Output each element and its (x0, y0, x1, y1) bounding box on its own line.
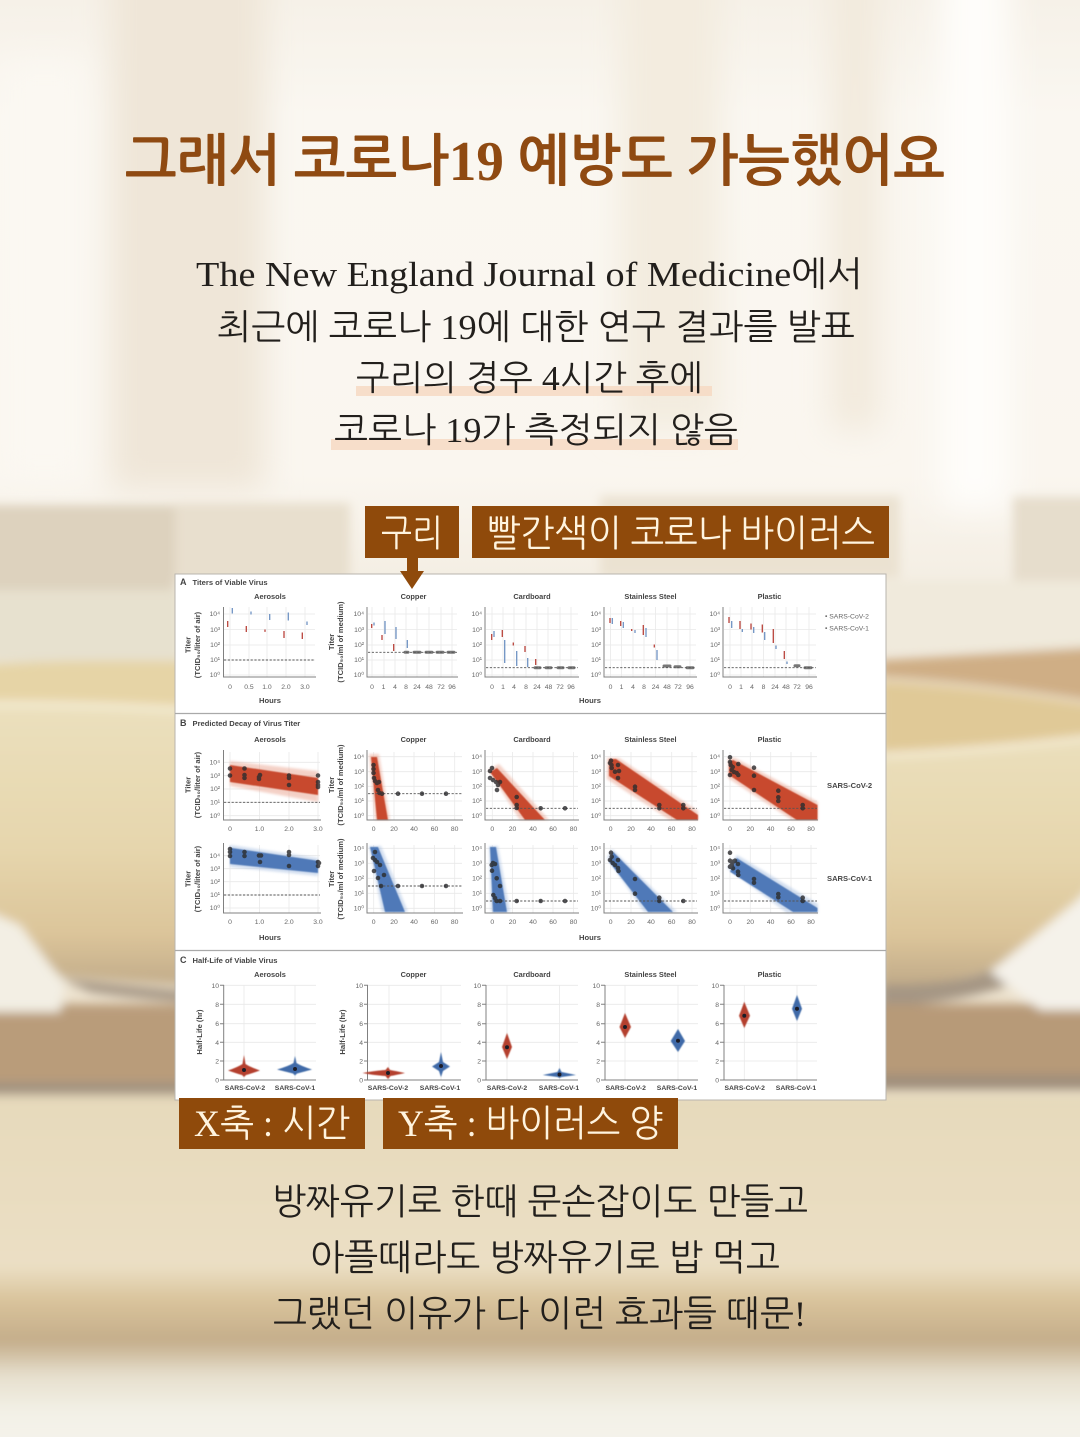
panel A heading: A (180, 577, 187, 587)
chart: stainless steel titers: 1 (620, 684, 624, 691)
chart: cardboard SARS-CoV-2 decay: 0 (490, 826, 494, 833)
chart: aerosols titers: 10² (210, 642, 221, 649)
chart: cardboard SARS-CoV-2 decay: 60 (549, 826, 557, 833)
chart: stainless steel SARS-CoV-1 decay: 10² (591, 876, 602, 882)
chart: aerosols SARS-CoV-1 decay: 10¹ (210, 892, 221, 899)
panel: NEJM chart figure (175, 574, 886, 1100)
chart: copper SARS-CoV-1 decay: 20 (390, 919, 398, 926)
chart: aerosols half-life: 6 (215, 1021, 219, 1028)
column titles: Copper (401, 735, 427, 744)
label: SARS-CoV-1 row: SARS-CoV-1 (827, 874, 873, 883)
chart: plastic titers: 10⁰ (710, 671, 720, 679)
panel B heading: B (180, 718, 187, 728)
chart: plastic SARS-CoV-1 decay: 10² (710, 876, 721, 882)
chart: aerosols SARS-CoV-2 decay: 0 (228, 826, 232, 833)
chart: stainless steel SARS-CoV-1 decay: 10¹ (591, 890, 602, 898)
chart: stainless steel titers: 72 (674, 684, 682, 691)
chart: plastic titers: 10³ (710, 627, 721, 634)
chart: aerosols SARS-CoV-1 decay: (TCID₅₀/liter of air) (193, 845, 202, 912)
panel B heading: Predicted Decay of Virus Titer (192, 719, 300, 728)
highlight: line 3 underline (356, 386, 712, 396)
chart: cardboard half-life (473, 983, 579, 1092)
chart: copper SARS-CoV-1 decay: 10² (354, 876, 365, 882)
chart: stainless steel SARS-CoV-1 decay: 40 (647, 919, 655, 926)
chart: cardboard half-life: SARS-CoV-2 (487, 1085, 527, 1092)
chart: copper SARS-CoV-2 decay: 10² (354, 784, 365, 790)
chart: stainless steel half-life (592, 983, 698, 1092)
legend: • SARS-CoV-1 (825, 626, 869, 632)
chart: cardboard SARS-CoV-1 decay: 10³ (472, 860, 483, 868)
chart: plastic titers: 1 (739, 684, 743, 691)
chart: plastic titers: 24 (771, 684, 779, 691)
panel C heading: Half-Life of Viable Virus (192, 956, 277, 965)
chart: stainless steel half-life: 4 (596, 1040, 600, 1047)
chart: cardboard SARS-CoV-1 decay: 10² (472, 876, 483, 882)
chart: copper SARS-CoV-1 decay: Titer (327, 871, 336, 887)
chart: copper SARS-CoV-2 decay: 10⁰ (354, 812, 364, 820)
chart: stainless steel SARS-CoV-2 decay: 60 (668, 826, 676, 833)
chart: stainless steel SARS-CoV-1 decay: 20 (627, 919, 635, 926)
chart: aerosols half-life: 10 (211, 983, 219, 990)
chart: plastic half-life: 4 (715, 1040, 719, 1047)
column titles (254, 735, 781, 744)
chart: copper SARS-CoV-1 decay (327, 838, 463, 926)
chart: copper SARS-CoV-2 decay: 10³ (354, 769, 365, 776)
chart: stainless steel half-life: 8 (596, 1002, 600, 1009)
chart: aerosols SARS-CoV-2 decay: 3.0 (313, 826, 323, 833)
chart: stainless steel SARS-CoV-2 decay: 20 (627, 826, 635, 833)
chart: cardboard titers: 72 (556, 684, 564, 691)
chart: copper titers: 0 (370, 684, 374, 691)
chart: plastic titers: 10⁴ (710, 611, 720, 618)
chart: stainless steel titers: 10⁰ (591, 671, 601, 679)
chart: copper titers: 1 (382, 684, 386, 691)
chart: copper SARS-CoV-2 decay: 0 (372, 826, 376, 833)
chart: aerosols SARS-CoV-2 decay: 2.0 (284, 826, 294, 833)
chart: plastic SARS-CoV-1 decay: 10⁴ (710, 846, 720, 852)
closing line 2: 아플때라도 방짜유기로 밥 먹고 (310, 1238, 780, 1278)
closing line 3: 그랬던 이유가 다 이런 효과들 때문! (273, 1294, 806, 1334)
column titles: Aerosols (254, 735, 286, 744)
chart: plastic SARS-CoV-1 decay: 20 (747, 919, 754, 926)
chart: aerosols SARS-CoV-2 decay: 10⁰ (210, 812, 220, 820)
chart: cardboard half-life: 4 (477, 1040, 481, 1047)
chart: stainless steel titers: 10² (591, 642, 602, 649)
chart: copper SARS-CoV-2 decay: 20 (390, 826, 398, 833)
chart: copper SARS-CoV-1 decay: 10³ (354, 860, 365, 868)
chart: copper titers (327, 601, 458, 691)
chart: stainless steel titers: Hours (579, 696, 601, 705)
chart: cardboard half-life: 0 (477, 1078, 481, 1084)
chart: copper titers: (TCID₅₀/ml of medium) (336, 601, 345, 683)
chart: cardboard SARS-CoV-2 decay: 10² (472, 784, 483, 790)
chart: plastic SARS-CoV-1 decay (710, 843, 818, 926)
chart: aerosols SARS-CoV-2 decay: 10³ (210, 773, 221, 780)
column titles: Plastic (758, 970, 781, 979)
column titles: Cardboard (513, 592, 551, 601)
chart: cardboard titers: 4 (512, 684, 516, 691)
chart: stainless steel SARS-CoV-2 decay: 10⁰ (591, 812, 601, 820)
chart: stainless steel SARS-CoV-1 decay: 10⁰ (591, 904, 601, 912)
chart: plastic SARS-CoV-2 decay: 60 (787, 826, 795, 833)
chart: stainless steel SARS-CoV-1 decay: Hours (579, 933, 601, 942)
chart: copper SARS-CoV-1 decay: 10⁰ (354, 904, 364, 912)
column titles: Stainless Steel (624, 735, 677, 744)
text block: research summary (196, 255, 863, 450)
chart: cardboard titers: 0 (490, 684, 494, 691)
chart: copper titers: 10⁰ (354, 671, 364, 679)
chart: cardboard SARS-CoV-2 decay: 10³ (472, 769, 483, 776)
chart: cardboard SARS-CoV-2 decay: 40 (529, 826, 537, 833)
chart: stainless steel SARS-CoV-1 decay (579, 843, 698, 942)
panel A: titers of viable virus (180, 577, 869, 705)
chart: copper titers: 48 (425, 684, 433, 691)
chart: copper half-life: 10 (355, 983, 363, 990)
chart: plastic SARS-CoV-1 decay: 10¹ (710, 890, 721, 898)
chart: copper SARS-CoV-1 decay: 40 (410, 919, 418, 926)
chart: plastic titers: 72 (793, 684, 801, 691)
chart: stainless steel half-life: 0 (596, 1078, 600, 1084)
chart: aerosols SARS-CoV-1 decay: 0 (228, 919, 232, 926)
chart: cardboard SARS-CoV-1 decay: 60 (549, 919, 557, 926)
text line 1: The New England Journal of Medicine에서 (196, 255, 863, 294)
chart: cardboard SARS-CoV-2 decay: 10⁰ (472, 812, 482, 820)
chart: cardboard half-life: 10 (473, 983, 481, 990)
chart: copper SARS-CoV-2 decay: Titer (327, 777, 336, 793)
chart: copper half-life: 0 (359, 1078, 363, 1084)
chart: copper titers: 72 (437, 684, 445, 691)
chart: aerosols titers: 0 (228, 684, 232, 691)
chart: cardboard titers: 10¹ (472, 657, 483, 664)
chart: aerosols SARS-CoV-1 decay: 2.0 (284, 919, 294, 926)
arrow: copper label to copper chart (400, 558, 424, 589)
chart: cardboard SARS-CoV-2 decay: 10¹ (472, 798, 483, 805)
chart: stainless steel titers: 48 (663, 684, 671, 691)
chart: cardboard SARS-CoV-1 decay: 10¹ (472, 890, 483, 898)
chart: plastic SARS-CoV-2 decay: 10³ (710, 769, 721, 776)
chart: aerosols half-life: 0 (215, 1078, 219, 1084)
chart: aerosols titers: Titer (184, 637, 192, 653)
chart: plastic titers: 48 (782, 684, 790, 691)
chart: plastic half-life: SARS-CoV-1 (776, 1085, 816, 1092)
chart: aerosols half-life: Half-Life (hr) (195, 1009, 204, 1055)
chart: copper SARS-CoV-1 decay: 0 (372, 919, 376, 926)
chart: cardboard SARS-CoV-1 decay: 10⁰ (472, 904, 482, 912)
chart: copper titers: 8 (404, 684, 408, 691)
chart: stainless steel SARS-CoV-1 decay: 0 (609, 919, 613, 926)
label: SARS-CoV-2 row: SARS-CoV-2 (827, 781, 872, 790)
chart: copper half-life: 8 (359, 1002, 363, 1009)
chart: aerosols SARS-CoV-1 decay: 1.0 (255, 919, 264, 926)
chart: cardboard titers: 10⁰ (472, 671, 482, 679)
chart: aerosols SARS-CoV-1 decay: 3.0 (313, 919, 323, 926)
column titles: Plastic (758, 735, 781, 744)
chart: cardboard SARS-CoV-1 decay: 40 (529, 919, 537, 926)
chart: stainless steel titers: 96 (686, 684, 694, 691)
chart: copper titers: 4 (393, 684, 397, 691)
chart: aerosols SARS-CoV-1 decay: Titer (184, 871, 192, 887)
chart: stainless steel titers: 10³ (591, 627, 602, 634)
chart: copper SARS-CoV-2 decay (327, 744, 463, 833)
chart: cardboard half-life: SARS-CoV-1 (539, 1085, 579, 1092)
column titles: Cardboard (513, 970, 551, 979)
legend: • SARS-CoV-2 (825, 614, 869, 620)
column titles: Cardboard (513, 735, 551, 744)
chart: copper SARS-CoV-1 decay: 10¹ (354, 890, 365, 898)
chart: copper titers: 10⁴ (354, 611, 364, 618)
chart: cardboard SARS-CoV-1 decay: 10⁴ (472, 846, 482, 852)
chart: plastic half-life: 10 (711, 983, 719, 990)
label box: x axis is time: X축 : 시간 (194, 1104, 350, 1145)
chart: plastic half-life (711, 983, 817, 1092)
chart: aerosols half-life: 4 (215, 1040, 219, 1047)
chart: copper SARS-CoV-2 decay: 80 (451, 826, 459, 833)
chart: copper titers: 10² (354, 642, 365, 649)
chart: stainless steel SARS-CoV-2 decay: 40 (647, 826, 655, 833)
chart: aerosols titers: 10¹ (210, 657, 221, 664)
chart: cardboard titers: 8 (524, 684, 528, 691)
chart: aerosols SARS-CoV-2 decay: Titer (184, 777, 192, 793)
chart: cardboard SARS-CoV-1 decay: 80 (570, 919, 577, 926)
text line 2: 최근에 코로나 19에 대한 연구 결과를 발표 (217, 308, 855, 347)
chart: stainless steel titers: 0 (609, 684, 613, 691)
chart: cardboard titers: 1 (501, 684, 505, 691)
chart: aerosols SARS-CoV-1 decay: 10⁴ (210, 853, 220, 860)
chart: copper SARS-CoV-1 decay: 10⁴ (354, 846, 364, 852)
chart: plastic SARS-CoV-1 decay: 80 (807, 919, 815, 926)
chart: cardboard SARS-CoV-1 decay: 0 (490, 919, 494, 926)
chart: aerosols SARS-CoV-1 decay: Hours (259, 933, 281, 942)
chart: aerosols SARS-CoV-1 decay: 10² (210, 879, 221, 886)
chart: aerosols SARS-CoV-1 decay (184, 843, 323, 942)
column titles: Stainless Steel (624, 970, 677, 979)
chart: stainless steel SARS-CoV-2 decay: 10² (591, 784, 602, 790)
chart: copper titers: 96 (448, 684, 456, 691)
chart: plastic titers (710, 607, 817, 691)
label box: x axis is time (179, 1098, 365, 1149)
chart: plastic SARS-CoV-2 decay: 0 (728, 826, 732, 833)
chart: copper SARS-CoV-2 decay: (TCID₅₀/ml of medium) (336, 744, 345, 826)
chart: aerosols half-life: 8 (215, 1002, 219, 1009)
chart: stainless steel SARS-CoV-2 decay: 10¹ (591, 798, 602, 805)
chart: copper SARS-CoV-2 decay: 10⁴ (354, 754, 364, 761)
chart: aerosols titers: 0.5 (244, 684, 254, 691)
chart: cardboard titers: 10⁴ (472, 611, 482, 618)
chart: stainless steel half-life: 6 (596, 1021, 600, 1028)
chart: cardboard SARS-CoV-2 decay: 20 (509, 826, 516, 833)
chart: plastic half-life: 6 (715, 1021, 719, 1028)
chart: plastic titers: 0 (728, 684, 732, 691)
text line 3: 구리의 경우 4시간 후에 (356, 359, 703, 398)
chart: copper SARS-CoV-1 decay: 60 (431, 919, 438, 926)
chart: stainless steel SARS-CoV-1 decay: 60 (668, 919, 676, 926)
chart: aerosols titers (184, 607, 316, 705)
chart: plastic SARS-CoV-2 decay: 20 (747, 826, 754, 833)
highlight: line 4 underline (331, 439, 738, 450)
chart: plastic SARS-CoV-2 decay: 80 (807, 826, 815, 833)
chart: plastic SARS-CoV-2 decay: 10⁰ (710, 812, 720, 820)
panel B: predicted decay of virus titer (180, 718, 873, 942)
chart: aerosols SARS-CoV-2 decay: 10¹ (210, 800, 221, 806)
chart: aerosols titers: (TCID₅₀/liter of air) (193, 611, 202, 678)
chart: copper SARS-CoV-2 decay: 10¹ (354, 798, 365, 805)
chart: cardboard half-life: 8 (477, 1002, 481, 1009)
chart: copper titers: 10¹ (354, 657, 365, 664)
column titles: Plastic (758, 592, 781, 601)
chart: copper titers: 24 (413, 684, 421, 691)
chart: plastic half-life: 0 (715, 1078, 719, 1084)
chart: plastic titers: 4 (750, 684, 754, 691)
chart: copper half-life: SARS-CoV-1 (420, 1085, 460, 1092)
chart: plastic SARS-CoV-2 decay: 40 (767, 826, 775, 833)
chart: stainless steel titers: 10⁴ (591, 611, 601, 618)
chart: cardboard titers: 10² (472, 642, 483, 649)
column titles: Aerosols (254, 970, 286, 979)
title: 그래서 코로나19 예방도 가능했어요 (125, 131, 945, 193)
chart: stainless steel half-life: SARS-CoV-1 (657, 1085, 697, 1092)
chart: cardboard half-life: 6 (477, 1021, 481, 1028)
chart: cardboard SARS-CoV-1 decay (472, 843, 579, 926)
label box: y axis is virus amount: Y축 : 바이러스 양 (398, 1104, 663, 1145)
panel C heading: C (180, 955, 187, 965)
chart: plastic SARS-CoV-1 decay: 60 (787, 919, 795, 926)
chart: plastic titers: 8 (762, 684, 766, 691)
chart: cardboard titers (472, 607, 579, 691)
chart: aerosols SARS-CoV-2 decay: 10⁴ (210, 760, 220, 766)
chart: aerosols titers: 10⁰ (210, 671, 220, 679)
column titles: Copper (401, 592, 427, 601)
chart: aerosols titers: Hours (259, 696, 281, 705)
chart: stainless steel SARS-CoV-1 decay: 80 (688, 919, 696, 926)
column titles (254, 592, 781, 601)
chart: stainless steel titers: 8 (642, 684, 646, 691)
chart: cardboard SARS-CoV-2 decay: 80 (570, 826, 577, 833)
label box: copper: 구리 (381, 514, 443, 555)
text block: closing message (272, 1182, 808, 1334)
chart: stainless steel SARS-CoV-2 decay (591, 750, 698, 833)
chart: stainless steel half-life: 2 (596, 1058, 600, 1066)
chart: copper half-life: SARS-CoV-2 (368, 1085, 408, 1092)
chart: copper titers: 10³ (354, 627, 365, 634)
chart: aerosols titers: 10³ (210, 627, 221, 634)
legend (825, 614, 869, 632)
text line 4: 코로나 19가 측정되지 않음 (334, 411, 738, 450)
label box: red is coronavirus: 빨간색이 코로나 바이러스 (487, 514, 875, 555)
chart: aerosols SARS-CoV-2 decay: 10² (210, 786, 221, 793)
chart: copper SARS-CoV-2 decay: 40 (410, 826, 418, 833)
chart: plastic SARS-CoV-1 decay: 40 (767, 919, 775, 926)
chart: copper half-life: Half-Life (hr) (338, 1009, 347, 1055)
chart: copper half-life: 4 (359, 1040, 363, 1047)
column titles: Stainless Steel (624, 592, 677, 601)
panel C: half-life of viable virus (180, 955, 817, 1092)
chart: stainless steel titers: 10¹ (591, 657, 602, 664)
chart: aerosols half-life: SARS-CoV-2 (225, 1085, 265, 1092)
chart: copper half-life (338, 983, 461, 1092)
chart: aerosols SARS-CoV-2 decay: 1.0 (255, 826, 264, 833)
chart: copper SARS-CoV-2 decay: 60 (431, 826, 438, 833)
chart: cardboard titers: 10³ (472, 627, 483, 634)
chart: aerosols SARS-CoV-1 decay: 10³ (210, 866, 221, 873)
chart: copper SARS-CoV-1 decay: 80 (451, 919, 459, 926)
chart: aerosols SARS-CoV-2 decay: (TCID₅₀/liter of air) (193, 751, 202, 818)
chart: stainless steel half-life: SARS-CoV-2 (605, 1085, 646, 1092)
chart: aerosols half-life: SARS-CoV-1 (275, 1085, 315, 1092)
chart: plastic half-life: 2 (715, 1058, 719, 1066)
chart: cardboard half-life: 2 (477, 1058, 481, 1066)
chart: cardboard titers: 24 (533, 684, 541, 691)
chart: copper half-life: 6 (359, 1021, 363, 1028)
chart: plastic SARS-CoV-1 decay: 10³ (710, 860, 721, 868)
column titles: Copper (401, 970, 427, 979)
chart: aerosols titers: 3.0 (300, 684, 310, 691)
chart: plastic titers: 96 (805, 684, 813, 691)
chart: aerosols titers: 10⁴ (210, 611, 220, 618)
chart: plastic half-life: 8 (715, 1002, 719, 1009)
chart: cardboard SARS-CoV-2 decay: 10⁴ (472, 754, 482, 761)
label box: copper (365, 506, 459, 558)
chart: plastic SARS-CoV-2 decay: 10² (710, 784, 721, 790)
chart: plastic SARS-CoV-1 decay: 10⁰ (710, 904, 720, 912)
column titles (254, 970, 781, 979)
panel A heading: Titers of Viable Virus (192, 578, 268, 587)
chart: aerosols titers: 2.0 (281, 684, 291, 691)
chart: stainless steel SARS-CoV-2 decay: 0 (609, 826, 613, 833)
chart: aerosols half-life (195, 983, 316, 1092)
closing line 1: 방짜유기로 한때 문손잡이도 만들고 (272, 1182, 808, 1222)
chart: stainless steel SARS-CoV-2 decay: 10⁴ (591, 754, 601, 761)
chart: stainless steel SARS-CoV-2 decay: 80 (688, 826, 696, 833)
chart: aerosols titers: 1.0 (262, 684, 272, 691)
chart: plastic half-life: SARS-CoV-2 (724, 1085, 765, 1092)
chart: aerosols half-life: 2 (215, 1058, 219, 1066)
chart: stainless steel half-life: 10 (592, 983, 600, 990)
chart: stainless steel SARS-CoV-2 decay: 10³ (591, 769, 602, 776)
chart: plastic SARS-CoV-1 decay: 0 (728, 919, 732, 926)
chart: plastic titers: 10² (710, 642, 721, 649)
chart: cardboard titers: 48 (545, 684, 552, 691)
chart: stainless steel SARS-CoV-1 decay: 10⁴ (591, 846, 601, 852)
chart: cardboard SARS-CoV-2 decay (472, 750, 579, 833)
chart: plastic SARS-CoV-2 decay: 10⁴ (710, 754, 720, 761)
chart: stainless steel SARS-CoV-1 decay: 10³ (591, 860, 602, 868)
chart: cardboard titers: 96 (567, 684, 575, 691)
chart: stainless steel titers: 4 (631, 684, 635, 691)
chart: aerosols SARS-CoV-2 decay (184, 750, 323, 833)
chart: copper SARS-CoV-1 decay: (TCID₅₀/ml of medium) (336, 838, 345, 920)
chart: cardboard SARS-CoV-1 decay: 20 (509, 919, 516, 926)
chart: aerosols SARS-CoV-1 decay: 10⁰ (210, 904, 220, 912)
chart: plastic SARS-CoV-2 decay (710, 750, 818, 833)
chart: plastic titers: 10¹ (710, 657, 721, 664)
column titles: Aerosols (254, 592, 286, 601)
chart: stainless steel titers (579, 607, 697, 705)
chart: stainless steel titers: 24 (652, 684, 659, 691)
chart: copper half-life: 2 (359, 1058, 363, 1066)
chart: plastic SARS-CoV-2 decay: 10¹ (710, 798, 721, 805)
chart: copper titers: Titer (327, 634, 336, 650)
